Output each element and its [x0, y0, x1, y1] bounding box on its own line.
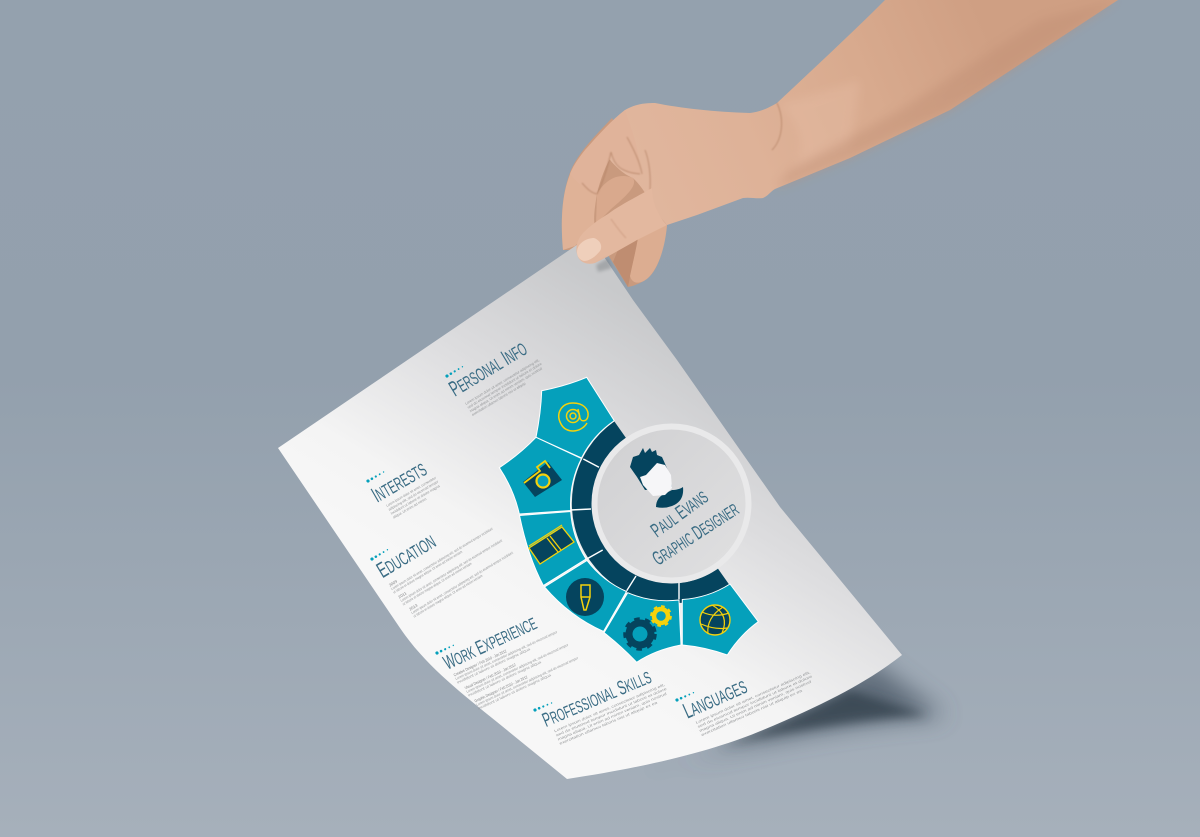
section: interests: incididunt ut labore et dolore magna: [390, 484, 441, 516]
entry 3: Lorem ipsum dolor sit amet, consectetur adipiscing elit, sed do eiusmod tempor incididunt: [411, 551, 514, 615]
section: personal info: sed do eiusmod tempor incididunt ut labore et dolore: [467, 362, 543, 410]
job 1: Creative Designer / Feb 2010 - Jan 2012: [453, 648, 508, 677]
heading: WORK EXPERIENCE: [440, 612, 540, 674]
dots: [675, 691, 695, 702]
section: languages: magna aliqua. Ut enim ad minim veniam, quis nostrud: [699, 680, 812, 733]
section: work experience: [435, 598, 581, 717]
finger base: [562, 118, 667, 287]
dots: [445, 365, 464, 378]
heading: PERSONAL INFO: [445, 335, 531, 401]
icon: gears: [625, 606, 671, 649]
section: professional skills: [533, 658, 671, 750]
heading: PROFESSIONAL SKILLS: [539, 666, 655, 732]
heading: EDUCATION: [372, 528, 440, 583]
segment: interests: [499, 437, 582, 514]
section: languages: sed do eiusmod tempor incididunt ut labore et dolore: [697, 674, 813, 729]
section: interests: [365, 449, 444, 523]
segment: personal info: [536, 377, 614, 458]
thumb nail: [577, 238, 601, 261]
body text: Lorem ipsum dolor sit amet, consectetur adipiscing elit,: [554, 683, 666, 733]
dark ring: [582, 430, 724, 593]
job 1: Lorem ipsum dolor sit amet, consectetur adipiscing elit, sed do eiusmod tempor: [455, 630, 559, 681]
index fingertip: [562, 172, 597, 250]
section: education: [370, 494, 516, 622]
heading: INTERESTS: [367, 456, 431, 507]
fingers behind the paper: [562, 118, 667, 287]
segment: education: [520, 512, 586, 586]
paper drop shadow: [640, 660, 945, 772]
entry 1: Lorem ipsum dolor sit amet, consectetur adipiscing elit, sed do eiusmod tempor incididunt: [390, 527, 494, 591]
entry 1: 2009: [388, 578, 399, 588]
arm and back of hand: [597, 0, 1118, 225]
index knuckle: [570, 110, 640, 194]
fan diagram: [499, 377, 758, 662]
segment: languages: [682, 584, 758, 655]
sheet of paper: [278, 236, 902, 779]
wrist highlight: [780, 80, 860, 175]
thumb shadow on paper: [596, 258, 612, 272]
ring finger: [630, 225, 667, 283]
section: personal info: [443, 330, 547, 420]
dots: [533, 701, 553, 712]
icon: pen: [566, 578, 604, 616]
section: professional skills: exercitation ullamco laboris nisi ut aliquip ex ea: [559, 700, 659, 746]
entry 2: 2011: [397, 590, 408, 599]
entry 1: [388, 523, 496, 594]
thumb: [576, 188, 667, 264]
job title: GRAPHIC DESIGNER: [649, 498, 743, 570]
section: interests: aliqua. Ut enim ad minim: [392, 497, 427, 520]
job 2: Visual Designer / Feb 2010 - Jan 2012: [464, 662, 517, 690]
entry 2: ut labore et dolore magna aliqua. Ut enim ad minim veniam: [402, 562, 473, 606]
section: personal info: exercitation ullamco laboris nisi ut aliquip: [471, 382, 526, 417]
entry 1: ut labore et dolore magna aliqua. Ut enim ad minim veniam: [392, 550, 463, 594]
entry 2: [397, 534, 505, 606]
job 3: Lorem ipsum dolor sit amet, consectetur adipiscing elit, sed do eiusmod tempor: [476, 656, 580, 707]
section: professional skills: sed do eiusmod tempor incididunt ut labore et dolore: [555, 687, 667, 737]
body text: Lorem ipsum dolor sit amet, consectetur adipiscing elit,: [465, 358, 540, 406]
dots: [366, 470, 385, 483]
icon: camera: [523, 461, 562, 497]
icon: person avatar: [630, 448, 683, 508]
entry 3: ut labore et dolore magna aliqua. Ut enim ad minim veniam: [413, 574, 483, 618]
knuckle creases: [582, 103, 782, 194]
icon: open book: [529, 525, 574, 564]
dots: [435, 644, 455, 655]
icon: globe: [700, 605, 730, 635]
body text: Lorem ipsum dolor sit amet, consectetur adipiscing elit,: [695, 670, 811, 725]
middle finger: [613, 238, 638, 287]
segment: professional skills: [604, 593, 681, 662]
job 3: Graphic Designer / Feb 2010 - Jan 2012: [474, 674, 529, 703]
body text: Lorem ipsum dolor sit amet, consectetur: [386, 476, 437, 508]
section: personal info: magna aliqua. Ut enim ad minim veniam, quis nostrud: [469, 367, 543, 413]
section: languages: [675, 644, 816, 741]
job 2: incididunt ut labore et dolore magna aliqua: [467, 660, 543, 698]
job 2: Lorem ipsum dolor sit amet, consectetur adipiscing elit, sed do eiusmod tempor: [466, 643, 570, 694]
icon: at sign: [559, 403, 588, 431]
hand and arm: [570, 0, 1118, 264]
section: languages: exercitation ullamco laboris nisi ut aliquip ex ea: [701, 688, 804, 737]
section: interests: adipiscing elit, sed do eiusmod tempor: [388, 479, 440, 512]
job 3: incididunt ut labore et dolore magna aliqua: [477, 673, 553, 711]
dots: [370, 548, 389, 561]
job 1: incididunt ut labore et dolore magna aliqua: [456, 647, 532, 685]
thumb crease: [611, 219, 626, 238]
index middle segment: [596, 176, 634, 224]
entry 3: 2013: [408, 602, 419, 612]
entry 2: Lorem ipsum dolor sit amet, consectetur adipiscing elit, sed do eiusmod tempor incididunt: [400, 539, 503, 603]
name: PAUL EVANS: [647, 486, 713, 542]
ring dividers: [571, 459, 679, 599]
segment: work experience: [544, 560, 626, 632]
section: professional skills: magna aliqua. Ut enim ad minim veniam, quis nostrud: [557, 692, 667, 742]
profile disc: [592, 424, 752, 584]
heading: LANGUAGES: [679, 673, 751, 723]
entry 3: [408, 547, 516, 618]
arm shading: [775, 0, 1118, 189]
